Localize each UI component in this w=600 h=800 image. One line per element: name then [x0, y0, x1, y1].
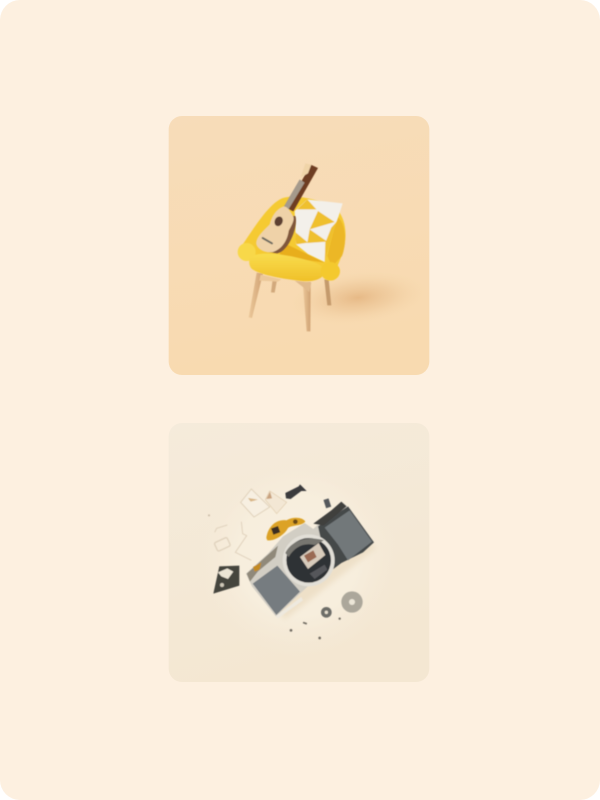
panel background	[169, 423, 429, 682]
lens mount ring	[283, 534, 335, 586]
chair seat and back	[238, 197, 346, 281]
bottom silver edge	[275, 597, 303, 618]
glass prisms	[241, 489, 287, 517]
chair legs	[249, 273, 331, 331]
shutter top detail	[247, 546, 278, 582]
camera	[246, 498, 374, 618]
pillow	[294, 199, 345, 263]
paper glow behind parts	[198, 456, 398, 656]
ukulele	[256, 163, 318, 253]
camera soft shadow	[268, 523, 376, 620]
mirror box	[300, 543, 325, 569]
large silver disc	[341, 591, 363, 613]
dark body behind mirror	[315, 506, 374, 583]
lower mirror detail	[310, 565, 327, 579]
camera silver chassis	[246, 502, 347, 617]
body side	[269, 216, 296, 253]
flexible orange circuit	[266, 518, 305, 540]
small washer	[321, 607, 332, 618]
tiny screws	[208, 514, 341, 639]
panel: chair photo	[169, 116, 430, 375]
left leatherette grip	[253, 566, 300, 615]
panel: camera photo	[169, 423, 429, 682]
neck and headstock	[287, 165, 318, 211]
body top	[256, 206, 294, 252]
panel background	[169, 116, 429, 375]
chair cast shadow	[286, 264, 430, 332]
thin wire parts	[214, 522, 251, 560]
right leatherette grip	[325, 510, 372, 560]
black metal plate	[213, 566, 239, 594]
small dark bracket	[285, 484, 307, 499]
